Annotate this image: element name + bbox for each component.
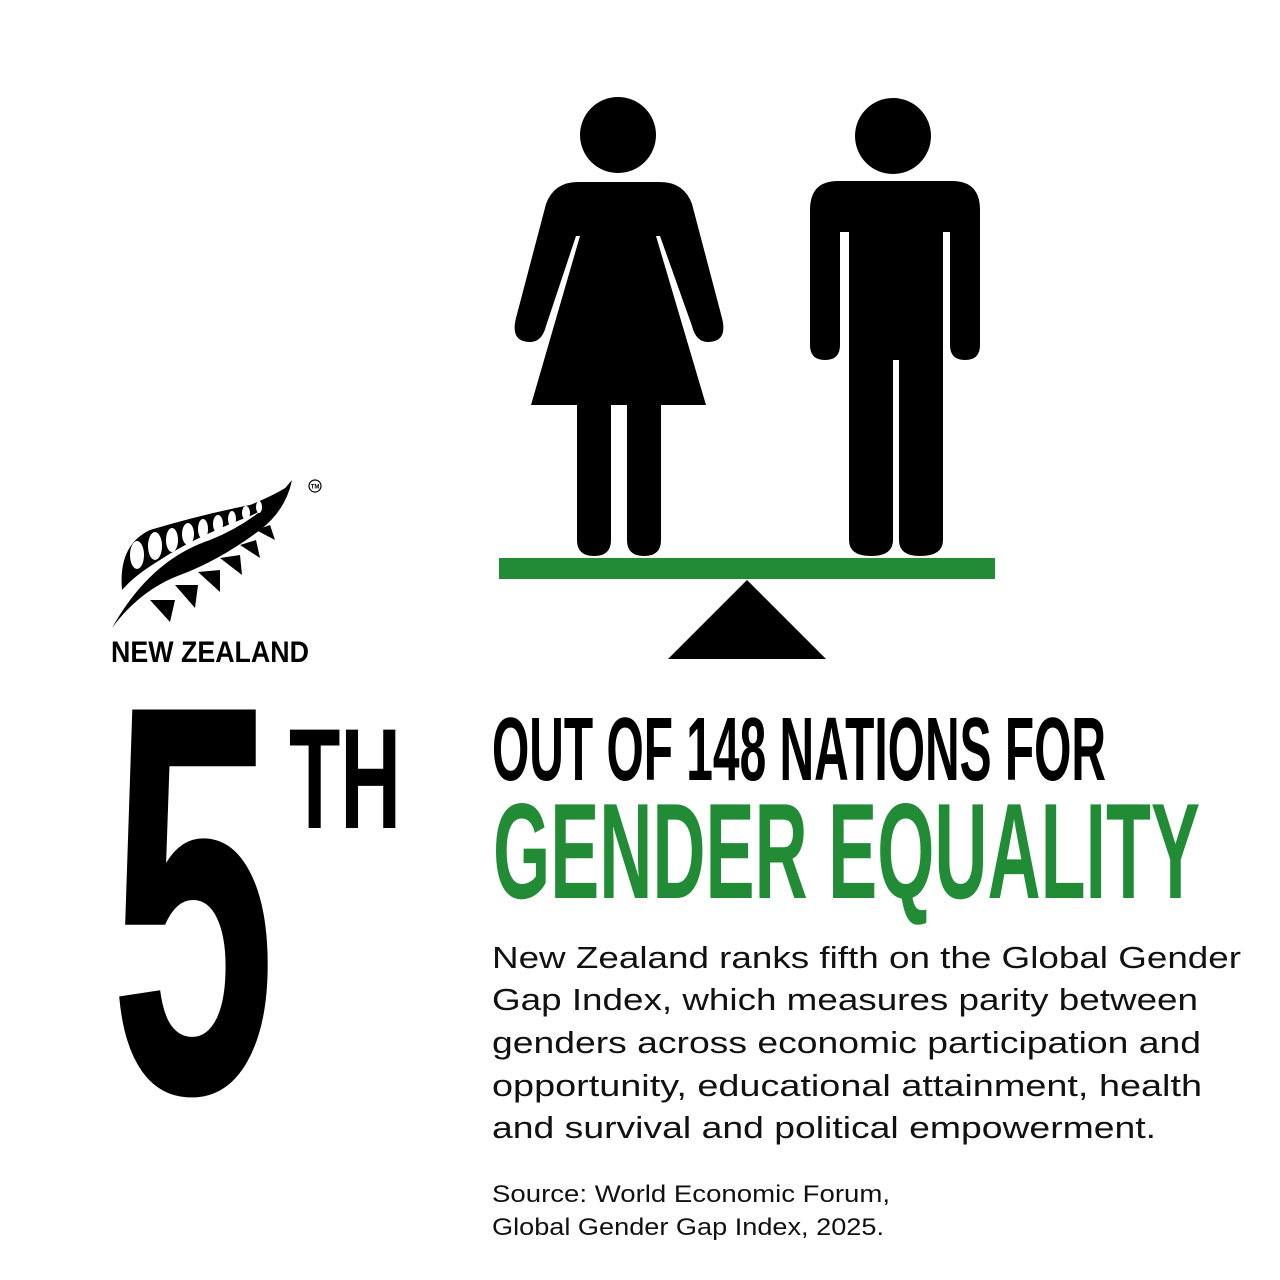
body text: New Zealand ranks fifth on the Global Gender bbox=[492, 940, 1241, 975]
body text: opportunity, educational attainment, health bbox=[492, 1068, 1202, 1103]
seesaw fulcrum bbox=[668, 580, 826, 659]
body text: genders across economic participation and bbox=[492, 1025, 1201, 1060]
logo text: NEW ZEALAND bbox=[111, 636, 309, 669]
trademark symbol bbox=[309, 480, 321, 492]
big number 5: 5 bbox=[110, 589, 276, 1210]
source note: Source: World Economic Forum, bbox=[492, 1181, 890, 1208]
source note bbox=[492, 1181, 890, 1241]
body text bbox=[492, 940, 1241, 1145]
superscript TH: TH bbox=[289, 700, 401, 859]
logo: New Zealand fern bbox=[111, 480, 321, 669]
body text: Gap Index, which measures parity between bbox=[492, 982, 1198, 1017]
source note: Global Gender Gap Index, 2025. bbox=[492, 1214, 884, 1241]
body text: and survival and political empowerment. bbox=[492, 1110, 1156, 1145]
icon: woman figure bbox=[515, 97, 723, 556]
icon: man figure bbox=[810, 98, 980, 556]
seesaw beam bbox=[499, 558, 995, 579]
trademark symbol: TM bbox=[311, 484, 319, 490]
